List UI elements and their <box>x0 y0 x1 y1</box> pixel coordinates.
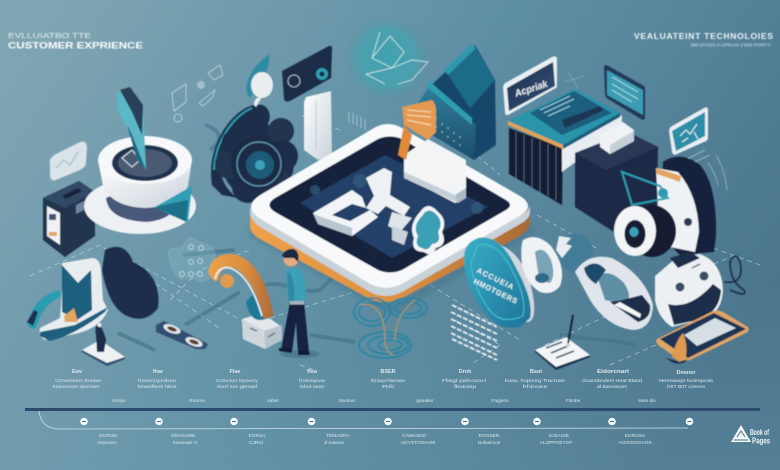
timeline labels below bar: CAMASED <box>402 433 426 439</box>
timeline labels above bar: sntnpr <box>112 398 126 404</box>
small star mark <box>564 72 584 88</box>
step labels row <box>52 369 714 389</box>
step 8: Eidorcnart <box>597 369 629 375</box>
timeline labels below bar: CJRIU <box>249 440 264 446</box>
timeline labels below bar: ORAGAME <box>171 433 195 439</box>
step 7: kuaa, hopnorg Tracruse <box>505 378 566 383</box>
icon: white block <box>404 139 466 203</box>
icon: pill of indicators <box>156 321 208 349</box>
step 9: Neenaoqe boiespcas <box>659 378 714 383</box>
teal slab <box>508 89 620 149</box>
step 3 <box>216 369 259 389</box>
timeline labels below bar: Sowsoan rz <box>172 440 198 446</box>
timeline labels above bar: Ssutoxc <box>338 398 356 404</box>
step 9: Doener <box>677 370 696 376</box>
icon: teal badge coin <box>464 238 534 328</box>
timeline labels below bar: Dufsancos <box>478 440 501 446</box>
timeline labels below bar: EOROSA <box>625 433 646 439</box>
icon: blue contour swirl <box>354 298 427 358</box>
icon: headset mask <box>655 252 745 327</box>
step 2: hoovcnproban <box>138 378 177 383</box>
icon: orange speech flag <box>398 100 436 160</box>
screen: Acpriak: Acpriak <box>513 79 550 100</box>
network of connector lines <box>30 115 760 370</box>
title: customer experience: EVLLUIATBO TTE <box>8 31 91 40</box>
icon: monitor on white pillar <box>282 46 365 160</box>
step 2: hewoiflemi hitos <box>138 384 177 389</box>
title: evaluating technologies: VEALUATEINT TECHNOLOIES <box>634 31 773 41</box>
icon: small chart screen <box>669 107 727 190</box>
timeline labels below bar: ALOPPOEYGF <box>540 440 572 446</box>
ribbed black server <box>509 115 622 205</box>
timeline labels below bar: EOIAOIB <box>549 433 569 439</box>
icon: teal house building <box>415 44 496 160</box>
step 8: all Bansowpore <box>597 384 627 389</box>
panel: central isometric platform <box>250 100 530 302</box>
step 6: Drok <box>459 369 472 375</box>
icon: phone with figure <box>82 323 125 366</box>
title: customer experience: CUSTOMER EXPRIENCE <box>8 40 143 50</box>
icon: dark gear with feather <box>211 54 298 203</box>
title: customer experience <box>8 31 143 50</box>
icon: teal document screen <box>604 65 645 120</box>
icon: screen on teal server <box>503 56 622 205</box>
icon: arch sculpture <box>27 247 158 341</box>
step 6: Fliagt pafcoxocl <box>442 378 486 383</box>
step 9: DIIT BIIT Lineors <box>667 384 706 389</box>
step 8: Guanobndent Heat Btand <box>582 378 643 383</box>
lens <box>614 205 692 257</box>
step 6 <box>442 369 486 389</box>
step 1: Cinvantooc tnalaw <box>55 378 102 383</box>
step 1: Eov <box>72 369 83 375</box>
step 5: Rili <box>382 384 394 389</box>
step 4: ffsa <box>307 369 318 375</box>
step 3: 3oof ser gteoarl <box>216 384 258 389</box>
timeline labels above bar: naber <box>267 398 280 404</box>
step 8 <box>582 369 643 389</box>
icon: note and pen <box>535 315 590 370</box>
icon: cloud of small glyphs <box>168 237 215 281</box>
timeline labels below bar: ROOSER <box>479 433 500 439</box>
data grid <box>451 305 497 360</box>
teal lens arm <box>622 172 668 205</box>
step 4: lofod seaz <box>300 384 325 389</box>
step 6: fleanisp <box>454 384 477 389</box>
icon: camera cube <box>575 122 716 257</box>
timeline labels above bar <box>112 398 656 404</box>
step 3: Concion bpeocy <box>216 378 259 383</box>
timeline labels below bar: Ocpoonn <box>97 440 117 446</box>
step 4 <box>299 369 326 389</box>
timeline markers <box>80 418 693 425</box>
step 7 <box>505 369 566 389</box>
icon: teal network globe <box>345 16 429 100</box>
icon: tablet with flame <box>656 310 749 363</box>
timeline labels below bar: TEMAORA <box>326 433 351 439</box>
ground shadows <box>118 125 635 350</box>
timeline labels below bar <box>97 433 652 446</box>
step 1 <box>52 369 102 389</box>
icon: white headset arc <box>575 257 653 330</box>
timeline labels below bar: SATRSE <box>99 433 117 439</box>
step 2 <box>138 369 177 389</box>
step 5: BSER <box>380 369 396 375</box>
timeline bar <box>25 408 760 429</box>
icon: large white ring <box>521 233 593 293</box>
logo: publisher mark: Pages <box>752 436 770 446</box>
icon: platform shadow <box>250 222 534 316</box>
step 2: Ihar <box>153 369 164 375</box>
icon: teal badge coin: ACCUEIA <box>475 266 516 292</box>
timeline labels above bar: gaoaker <box>416 398 434 404</box>
timeline labels below bar: Jl.nawsor <box>324 440 345 446</box>
timeline labels below bar: EORSA <box>249 433 266 439</box>
arch body <box>656 157 716 255</box>
step 1: esanovots speneer <box>52 384 100 389</box>
logo: publisher mark: Book of <box>750 428 769 437</box>
icon: white geometric letters <box>313 168 412 245</box>
title: evaluating technologies: 38E1PGE0 0 UPRAN 1'005 PORTY <box>690 42 771 48</box>
timeline labels below bar: AOIODOOAOS <box>618 440 652 446</box>
icon: pedestal with teal tool <box>84 87 196 234</box>
step 5 <box>371 369 406 389</box>
step 7: frhinoee <box>522 384 548 389</box>
timeline labels above bar: Ftimbe <box>566 398 581 404</box>
icon: teal figure <box>412 206 444 254</box>
icon: chart card <box>50 142 87 180</box>
step 4: frotoopuw <box>299 378 326 383</box>
icon: floating line glyphs <box>172 65 223 122</box>
step 5: Eraqo'iseoax <box>371 378 406 383</box>
icon: orange arc on box <box>208 254 282 349</box>
screen: Acpriak <box>503 56 557 115</box>
logo: publisher mark <box>731 425 770 446</box>
icon: teal badge coin: HMOTGERS <box>472 277 519 306</box>
step 9 <box>659 370 714 389</box>
figure: person standing <box>279 249 320 358</box>
timeline labels above bar: Fagpion <box>491 398 509 404</box>
step 3: Flae <box>229 369 241 375</box>
timeline labels below bar: AOYSTOOAUM <box>401 440 435 446</box>
step 7: Bsot <box>530 369 542 375</box>
icon: server box <box>43 181 95 257</box>
title: evaluating technologies <box>634 31 773 48</box>
timeline labels above bar: sssn dis <box>638 398 656 404</box>
timeline labels above bar: Roorne <box>189 398 205 404</box>
